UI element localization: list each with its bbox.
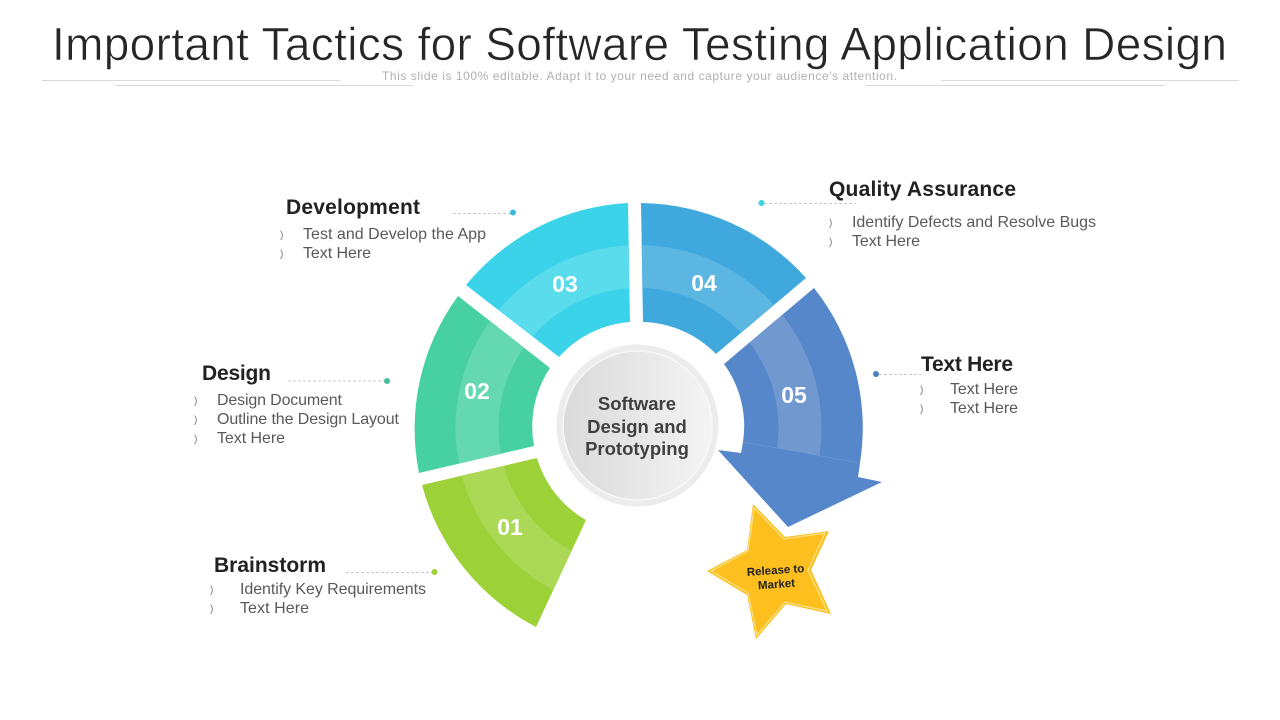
callout: development: Text Here [303, 245, 371, 262]
callout: development: Development [286, 196, 420, 219]
callout: development: ) [280, 249, 283, 260]
callout: brainstorm: Text Here [240, 600, 309, 617]
callout: development: Test and Develop the App [303, 226, 486, 243]
callout: design: Text Here [217, 430, 285, 447]
callout: design: ) [194, 434, 197, 445]
segment 05 arrow [718, 288, 882, 527]
segment 04 [641, 203, 806, 354]
title: Important Tactics for Software Testing Application Design [52, 18, 1227, 70]
callout: text here: Text Here [921, 353, 1013, 376]
segment 03: 03 [552, 271, 578, 297]
callout: text here: ) [920, 404, 923, 415]
centre circle: Design and [587, 416, 687, 437]
callout: design: ) [194, 396, 197, 407]
callout: design: ) [194, 415, 197, 426]
callout: design [194, 362, 400, 447]
segment 02: 02 [464, 378, 490, 404]
centre circle: Software [598, 393, 676, 414]
segment 01: 01 [497, 514, 523, 540]
callout: quality assurance: Text Here [852, 233, 920, 250]
segment 05 arrow: 05 [781, 382, 807, 408]
callout: text here: Text Here [950, 381, 1018, 398]
callout: development [280, 196, 516, 262]
star: release to market: Release to [746, 563, 805, 579]
callout: development: ) [280, 230, 283, 241]
callout: brainstorm: ) [210, 585, 213, 596]
callout: brainstorm [210, 554, 438, 617]
callout: design: Outline the Design Layout [217, 411, 400, 428]
callout: text here: ) [920, 385, 923, 396]
segment 03 [466, 203, 630, 357]
star: release to market: Market [758, 578, 796, 592]
callout: text here [873, 353, 1018, 417]
segment 02 [414, 296, 550, 473]
callout: brainstorm: Brainstorm [214, 554, 326, 577]
callout: quality assurance: ) [829, 237, 832, 248]
callout: brainstorm: Identify Key Requirements [240, 581, 426, 598]
centre circle [556, 344, 718, 506]
callout: quality assurance: Quality Assurance [829, 178, 1016, 201]
callout: text here: Text Here [950, 400, 1018, 417]
callout: brainstorm: ) [210, 604, 213, 615]
segment 04: 04 [691, 270, 717, 296]
callout: design: Design Document [217, 392, 343, 409]
star: release to market [707, 504, 831, 639]
callout: quality assurance: ) [829, 218, 832, 229]
segment 01 [422, 458, 586, 627]
centre circle: Prototyping [585, 438, 689, 459]
callout: quality assurance [758, 178, 1096, 250]
callout: quality assurance: Identify Defects and Resolve Bugs [852, 214, 1096, 231]
subtitle: This slide is 100% editable. Adapt it to your need and capture your audience's attention. [382, 69, 897, 83]
callout: design: Design [202, 362, 271, 385]
